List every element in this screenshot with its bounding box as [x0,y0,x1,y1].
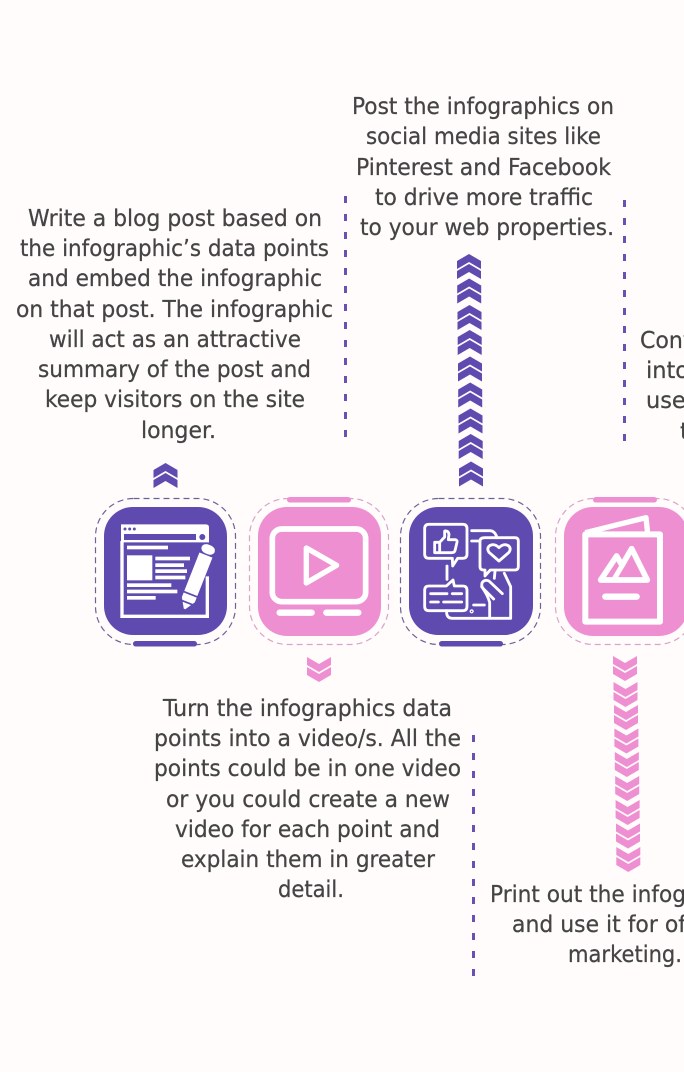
text block: blog post: on that post. The infographic [16,297,333,323]
text block: video: points into a video/s. All the [154,726,461,752]
text block: blog post [16,206,333,444]
dashed divider left [344,196,347,440]
text block: blog post: the infographic’s data points [20,236,329,262]
dashed divider right [623,200,626,444]
text block: social media: social media sites like [366,124,601,150]
arrow: short pink chevrons [307,657,331,682]
arrow: long purple chevrons [457,254,483,486]
text block: social media: Post the infographics on [352,94,614,120]
text block: video: detail. [278,877,344,903]
arrow: long pink chevrons [613,656,640,872]
text block: clipped right column [640,328,684,445]
text block: blog post: keep visitors on the site [45,387,305,413]
icon: printed brochure [556,497,684,644]
text block: video: Turn the infographics data [162,696,452,722]
dashed divider bottom [472,735,475,979]
text block: video: points could be in one video [154,756,461,782]
text block: blog post: will act as an attractive [49,327,301,353]
text block: social media: to drive more traffic [375,185,593,211]
icon: video player [250,497,388,644]
text block: blog post: longer. [141,418,216,444]
text block: social media [352,94,614,241]
text block: video: or you could create a new [166,787,450,813]
icon: social media hand and speech bubbles [400,498,540,646]
text block: blog post: summary of the post and [38,357,311,383]
text block: print [490,882,684,968]
icon: blog post page and pencil [96,498,236,646]
text block: social media: to your web properties. [360,215,614,241]
text block: video: explain them in greater [181,847,435,873]
text block: video: video for each point and [175,817,440,843]
text block: social media: Pinterest and Facebook [356,155,612,181]
text block: blog post: and embed the infographic [28,266,322,292]
text block: blog post: Write a blog post based on [28,206,322,232]
text block: video [154,696,461,903]
arrow: short purple chevrons [154,463,178,488]
